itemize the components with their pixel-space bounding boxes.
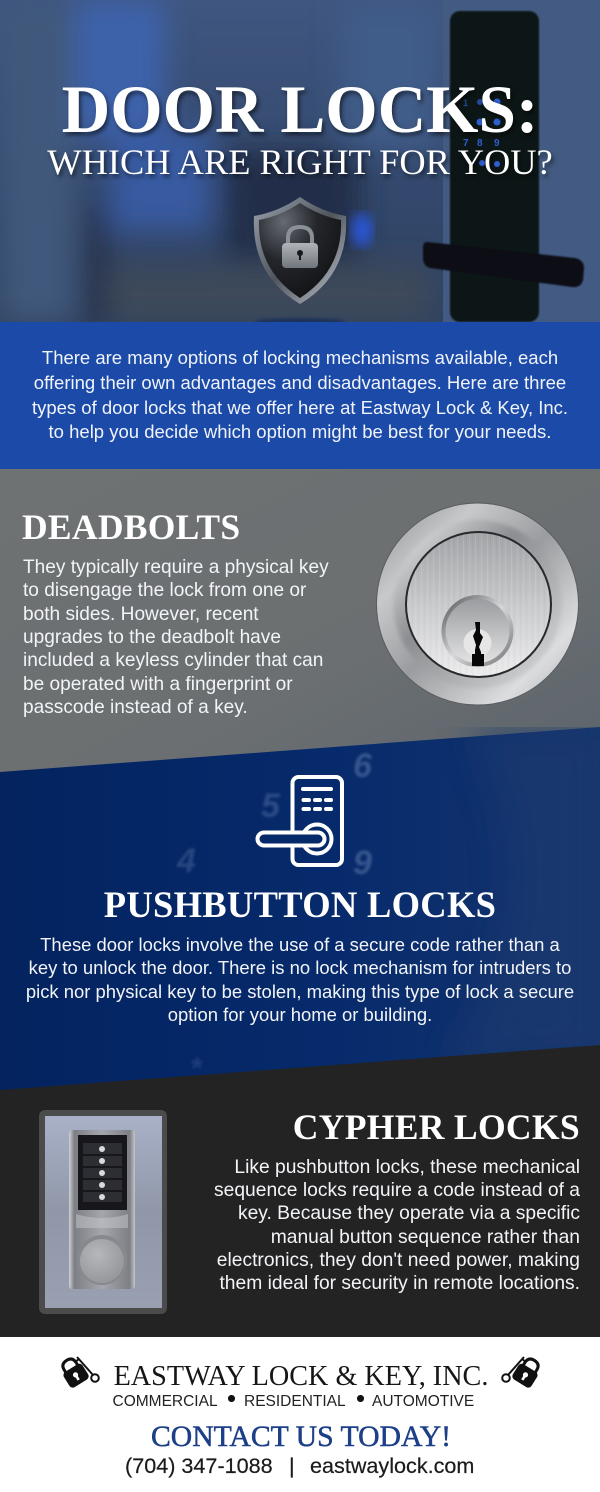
hero background: blurred door and smart lock photo: 7	[463, 138, 469, 149]
heading: cypher locks: CYPHER LOCKS	[293, 1107, 580, 1147]
photo: cypher lock	[39, 1110, 167, 1314]
pushbutton text: These door locks involve the use of a secure code rather than a	[40, 934, 560, 955]
intro text: to help you decide which option might be best for your needs.	[49, 421, 551, 442]
hero background: blurred door and smart lock photo: 8	[477, 138, 483, 149]
deadbolts text: be operated with a fingerprint or	[23, 674, 293, 694]
contact heading: CONTACT US TODAY!	[151, 1421, 451, 1453]
intro text	[32, 347, 568, 442]
cypher text: key. Because they operate via a specific	[238, 1203, 580, 1224]
tagline	[112, 1393, 474, 1410]
hero background: blurred door and smart lock photo: 9	[494, 138, 500, 149]
panel: cypher locks background	[0, 1045, 600, 1337]
icon: deadbolt lock	[376, 502, 579, 706]
pushbutton text: option for your home or building.	[168, 1004, 432, 1025]
intro text: types of door locks that we offer here at Eastway Lock & Key, Inc.	[32, 396, 568, 418]
intro text: offering their own advantages and disadvantages. Here are three	[34, 372, 566, 393]
tagline: COMMERCIAL	[112, 1393, 218, 1410]
heading: pushbutton locks: PUSHBUTTON LOCKS	[104, 884, 496, 925]
panel: pushbutton locks background	[0, 727, 600, 1090]
panel: pushbutton locks background: 5	[261, 787, 281, 825]
panel: pushbutton locks background: 6	[353, 747, 373, 785]
deadbolts text: passcode instead of a key.	[23, 697, 248, 718]
pushbutton text: key to unlock the door. There is no lock mechanism for intruders to	[29, 957, 571, 978]
tagline: RESIDENTIAL	[244, 1393, 346, 1410]
cypher text	[214, 1157, 580, 1294]
contact details: (704) 347-1088	[125, 1453, 273, 1478]
deadbolts text: They typically require a physical key	[23, 557, 329, 578]
deadbolts text: to disengage the lock from one or	[23, 580, 306, 601]
hero background: blurred door and smart lock photo	[0, 0, 600, 322]
icon: padlock with key right	[501, 1356, 540, 1388]
icon: security shield with padlock	[254, 197, 346, 322]
cypher text: them ideal for security in remote locations.	[219, 1273, 580, 1294]
title line 1: DOOR LOCKS:	[62, 72, 538, 147]
panel: pushbutton locks background: 9	[353, 844, 372, 882]
intro text: There are many options of locking mechanisms available, each	[42, 347, 558, 368]
panel: footer	[0, 1337, 600, 1492]
company name: EASTWAY LOCK & KEY, INC.	[114, 1361, 488, 1392]
cypher text: electronics, they don't need power, making	[217, 1250, 580, 1271]
contact details: eastwaylock.com	[310, 1453, 474, 1478]
deadbolts text: upgrades to the deadbolt have	[23, 627, 281, 648]
title	[47, 72, 556, 182]
heading: deadbolts: DEADBOLTS	[22, 507, 240, 547]
deadbolts text	[23, 557, 329, 718]
tagline: AUTOMOTIVE	[372, 1393, 474, 1410]
pushbutton text: pick nor physical key to be stolen, making this type of lock a secure	[26, 981, 574, 1002]
deadbolts text: included a keyless cylinder that can	[23, 650, 323, 671]
hero background: blurred door and smart lock photo: 1	[463, 98, 468, 108]
panel: deadbolts background	[0, 469, 600, 772]
deadbolts text: both sides. However, recent	[23, 604, 259, 625]
cypher text: manual button sequence rather than	[271, 1227, 580, 1248]
icon: padlock with key left	[61, 1356, 100, 1388]
icon: keypad door handle	[256, 775, 344, 867]
contact details	[125, 1453, 474, 1478]
panel: pushbutton locks background: 4	[176, 842, 196, 880]
panel: introduction	[0, 322, 600, 469]
panel: pushbutton locks background: *	[190, 1052, 203, 1085]
title line 2: WHICH ARE RIGHT FOR YOU?	[47, 142, 553, 182]
cypher text: sequence locks require a code instead of a	[214, 1180, 580, 1201]
contact details: |	[289, 1453, 295, 1478]
cypher text: Like pushbutton locks, these mechanical	[234, 1157, 580, 1178]
pushbutton text	[26, 934, 574, 1025]
